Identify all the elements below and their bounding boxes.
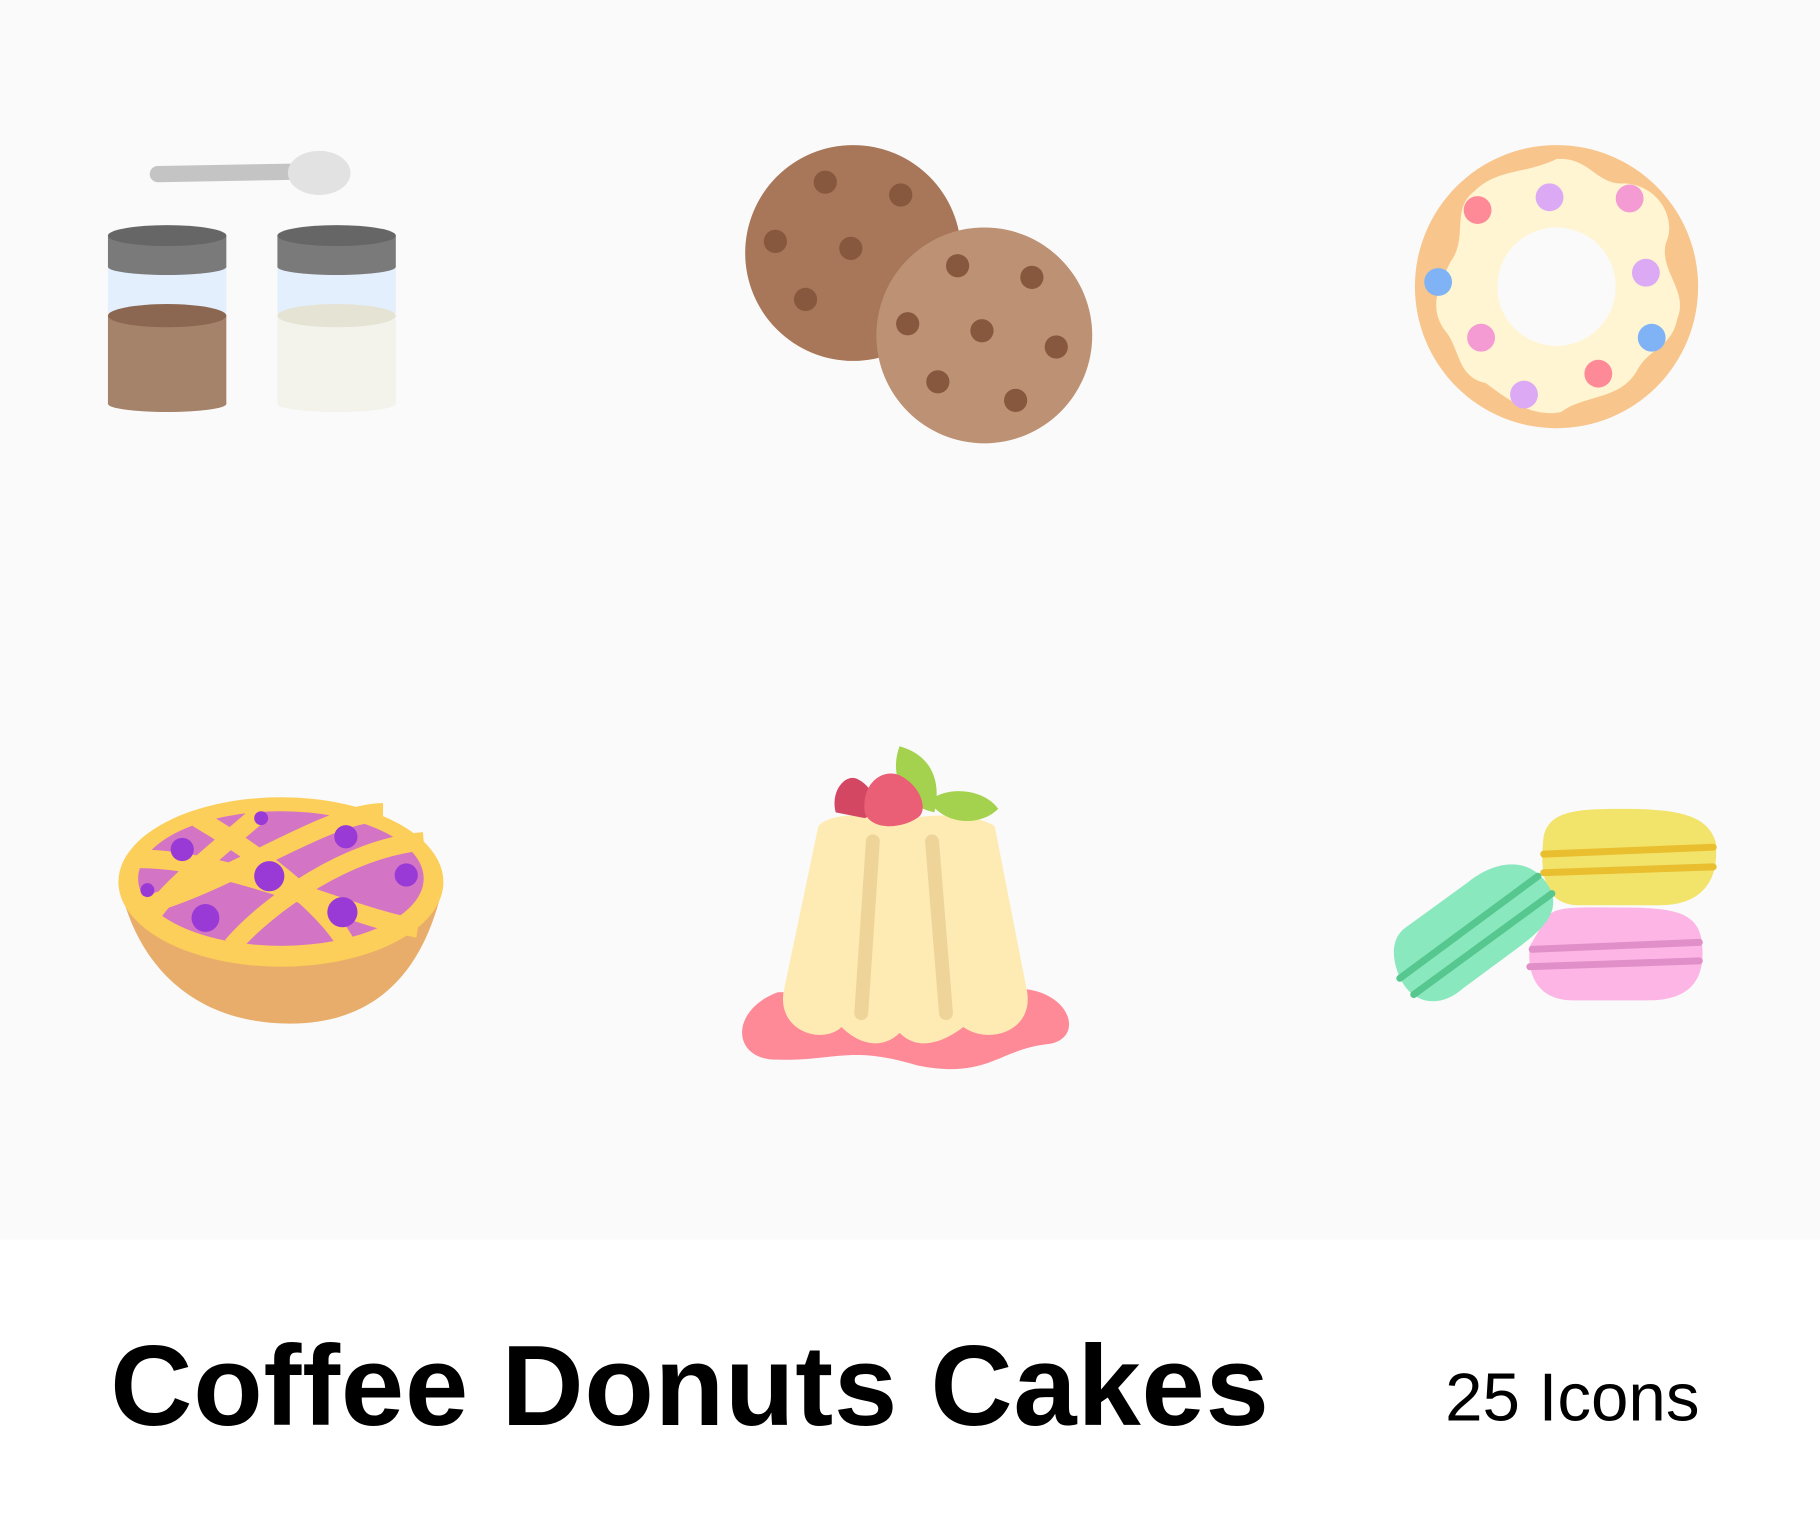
icon: macarons	[1394, 809, 1716, 1001]
icon: sugar jar	[277, 225, 396, 412]
icon: coffee and sugar jars	[108, 151, 396, 412]
icon: cookies	[745, 145, 1092, 443]
icon: blueberry pie	[118, 797, 443, 1024]
icon: donut	[1415, 145, 1698, 428]
icon: pudding	[742, 746, 1069, 1069]
icon: spoon	[158, 151, 351, 195]
title: Coffee Donuts Cakes	[110, 1323, 1270, 1450]
icon count: 25 Icons	[1445, 1360, 1700, 1435]
icon: coffee jar	[108, 225, 226, 412]
